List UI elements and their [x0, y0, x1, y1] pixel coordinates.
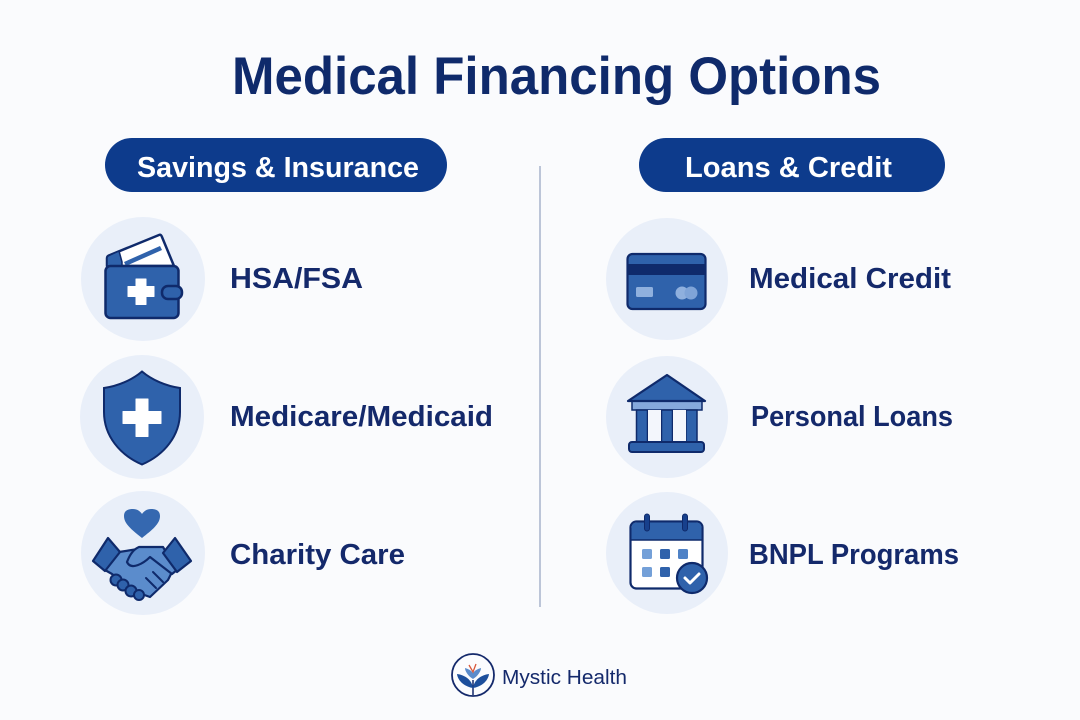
label: Medical Credit: Medical Credit — [749, 263, 951, 295]
label: Personal Loans: Personal Loans — [751, 401, 953, 433]
heading: Savings & Insurance: Savings & Insurance — [137, 152, 419, 184]
icon: credit card — [606, 218, 728, 340]
icon: bank building — [606, 356, 728, 478]
icon: wallet with medical cross — [81, 217, 205, 341]
heading: Loans & Credit — [639, 138, 945, 192]
icon: handshake with heart — [81, 491, 205, 615]
heading: Savings & Insurance — [105, 138, 447, 192]
label: Medicare/Medicaid: Medicare/Medicaid — [230, 401, 493, 433]
label: BNPL Programs: BNPL Programs — [749, 539, 959, 571]
icon: calendar with check — [606, 492, 728, 614]
heading: Loans & Credit: Loans & Credit — [685, 152, 892, 184]
logo: Mystic Health — [452, 654, 627, 696]
label: HSA/FSA: HSA/FSA — [230, 263, 363, 295]
title: Medical Financing Options — [232, 47, 881, 106]
logo: Mystic Health: Mystic Health — [502, 666, 627, 689]
label: Charity Care: Charity Care — [230, 539, 405, 571]
icon: shield with cross — [80, 355, 204, 479]
